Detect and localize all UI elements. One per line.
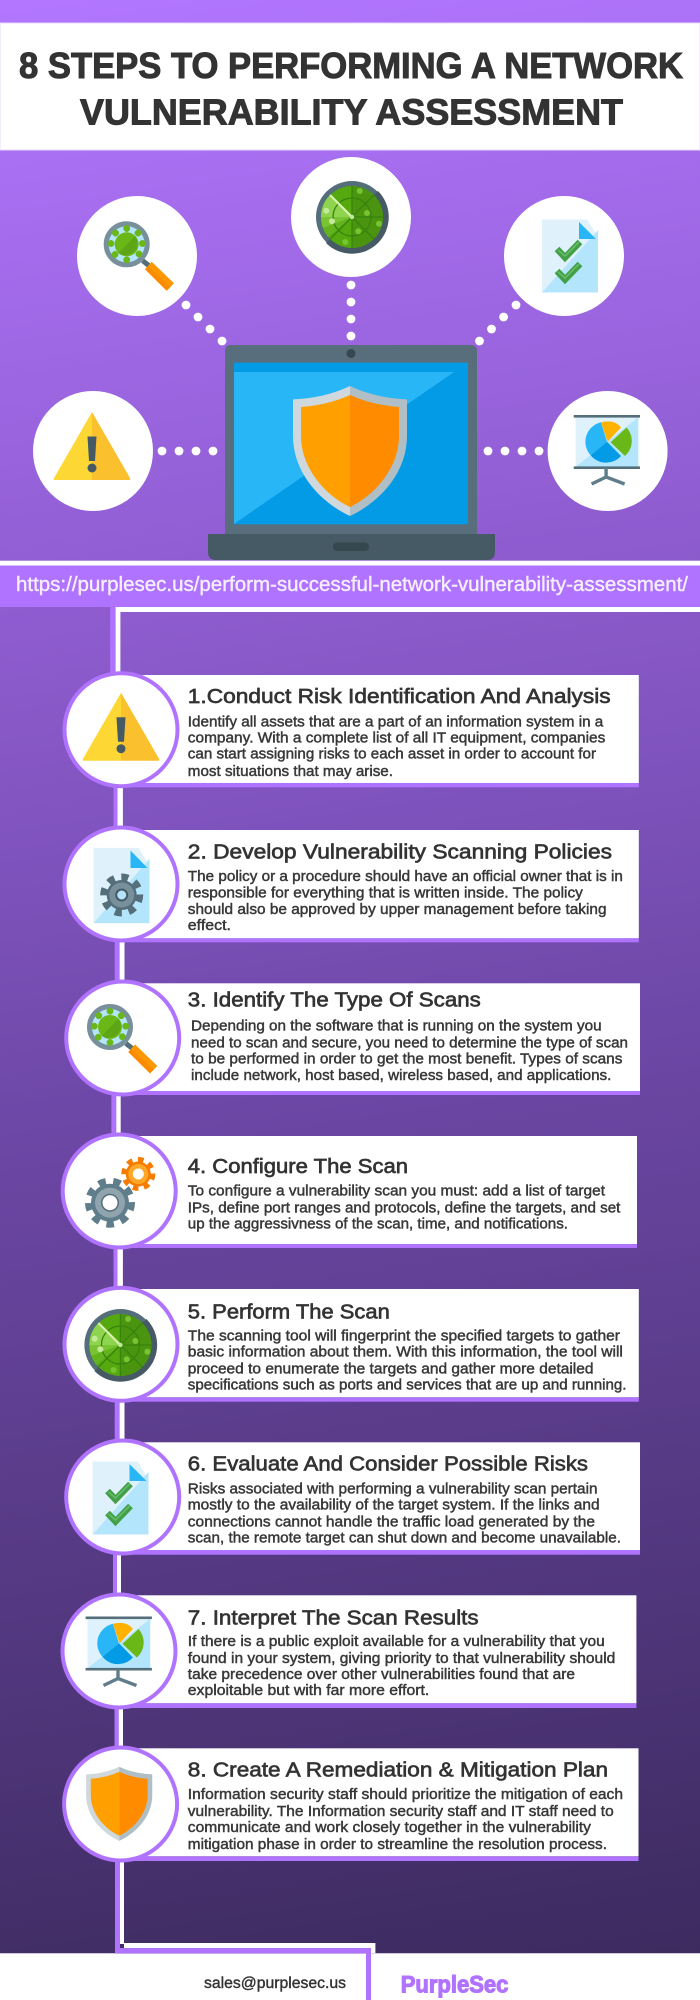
step 5 text: proceed to enumerate the targets and gather more detailed: [188, 1361, 594, 1377]
icon: warning triangle: [33, 391, 153, 511]
icon: step 1 warning: [64, 673, 178, 786]
panel: step 1 card: [121, 675, 639, 787]
step 6 text: [188, 1482, 621, 1547]
step 6 text: scan, the remote target can shut down and become unavailable.: [188, 1531, 621, 1547]
step 5: [64, 1288, 639, 1402]
icon: step 7 presentation chart: [62, 1594, 176, 1708]
step 8 text: vulnerability. The Information security staff and IT staff need to: [188, 1804, 614, 1820]
step 7 text: [188, 1634, 615, 1699]
panel: step 5 card: [121, 1289, 639, 1402]
icon: radar: [291, 157, 411, 277]
hero illustration: [33, 157, 668, 560]
icon: magnifier with virus: [77, 196, 197, 316]
icon: step 2 policy document gear: [64, 828, 178, 940]
step 4: [63, 1134, 637, 1248]
icon: checklist document: [504, 196, 624, 316]
timeline connector: [110, 607, 700, 1950]
step 8 heading: 8. Create A Remediation & Mitigation Plan: [188, 1759, 608, 1782]
step 1 text: Identify all assets that are a part of an information system in a: [188, 715, 604, 731]
panel: step 3 card: [122, 983, 640, 1095]
step 3 text: Depending on the software that is running on the system you: [191, 1019, 602, 1035]
step 8 text: Information security staff should prioritize the mitigation of each: [188, 1787, 623, 1803]
url banner: https://purplesec.us/perform-successful-network-vulnerability-assessment/: [16, 574, 688, 596]
step 3 text: to be performed in order to get the most benefit. Types of scans: [191, 1051, 622, 1067]
step 7 text: take precedence over other vulnerabilities found that are: [188, 1667, 575, 1683]
step 4 text: IPs, define port ranges and protocols, define the targets, and set: [188, 1200, 620, 1216]
dotted connectors: [158, 281, 543, 455]
step 8: [64, 1748, 639, 1861]
step 1 heading: 1.Conduct Risk Identification And Analysis: [188, 685, 611, 708]
step 5 heading: 5. Perform The Scan: [188, 1300, 390, 1323]
step 2 text: [188, 869, 623, 934]
step 2 heading: 2. Develop Vulnerability Scanning Policies: [188, 840, 612, 863]
step 8 text: [188, 1787, 623, 1853]
step 1 text: most situations that may arise.: [188, 764, 393, 780]
step 3: [66, 982, 640, 1095]
step 4 text: [188, 1184, 620, 1233]
step 5 text: basic information about them. With this information, the tool will: [188, 1345, 623, 1361]
step 3 text: need to scan and secure, you need to determine the type of scan: [191, 1035, 628, 1051]
email: sales@purplesec.us: [204, 1975, 346, 1992]
panel: step 4 card: [119, 1136, 637, 1248]
panel: step 7 card: [119, 1595, 636, 1708]
title line 2: VULNERABILITY ASSESSMENT: [80, 92, 623, 132]
step 6: [66, 1440, 640, 1555]
title panel: [0, 23, 700, 150]
icon: step 8 shield: [64, 1748, 177, 1860]
icon: presentation chart: [548, 391, 668, 511]
step 6 text: mostly to the availability of the target system. If the links and: [188, 1498, 600, 1514]
step 4 text: up the aggressivness of the scan, time, and notifications.: [188, 1217, 568, 1233]
step 4 heading: 4. Configure The Scan: [188, 1155, 408, 1178]
step 5 text: specifications such as ports and services that are up and running.: [188, 1377, 627, 1393]
step 4 text: To configure a vulnerability scan you must: add a list of target: [188, 1184, 605, 1200]
laptop with shield: [208, 345, 495, 560]
step 2 text: The policy or a procedure should have an official owner that is in: [188, 869, 623, 885]
step 7 text: found in your system, giving priority to that vulnerability should: [188, 1651, 615, 1667]
icon: step 3 magnifier: [66, 982, 179, 1094]
step 1 text: [188, 715, 605, 780]
step 2 text: responsible for everything that is written inside. The policy: [188, 885, 584, 901]
step 5 text: The scanning tool will fingerprint the specified targets to gather: [188, 1329, 620, 1345]
icon: step 5 radar: [64, 1288, 178, 1401]
logo: PurpleSec: PurpleSec: [401, 1972, 508, 1999]
step 5 text: [188, 1329, 627, 1393]
step 2 text: effect.: [188, 918, 231, 934]
step 1: [64, 673, 639, 787]
step 3 text: include network, host based, wireless based, and applications.: [191, 1068, 611, 1084]
step 3 heading: 3. Identify The Type Of Scans: [188, 989, 481, 1012]
icon: step 6 checklist document: [66, 1440, 179, 1554]
step 2: [64, 828, 639, 942]
step 7 text: exploitable but with far more effort.: [188, 1683, 429, 1699]
url banner: [0, 561, 700, 607]
step 6 heading: 6. Evaluate And Consider Possible Risks: [188, 1453, 588, 1476]
step 3 text: [191, 1019, 628, 1084]
panel: step 2 card: [121, 830, 639, 942]
step 6 text: Risks associated with performing a vulnerability scan pertain: [188, 1482, 598, 1498]
step 7 text: If there is a public exploit available for a vulnerability that you: [188, 1634, 605, 1650]
panel: step 8 card: [120, 1748, 638, 1861]
title line 1: 8 STEPS TO PERFORMING A NETWORK: [19, 45, 683, 86]
panel: step 6 card: [122, 1442, 640, 1555]
step 2 text: should also be approved by upper management before taking: [188, 902, 607, 918]
step 8 text: communicate and work closely together in the vulnerability: [188, 1820, 592, 1836]
footer connector: [115, 1943, 375, 2000]
step 8 text: mitigation phase in order to streamline the resolution process.: [188, 1837, 607, 1853]
step 1 text: company. With a complete list of all IT equipment, companies: [188, 731, 605, 747]
step 7: [62, 1594, 636, 1708]
footer: [0, 1943, 700, 2000]
step 7 heading: 7. Interpret The Scan Results: [188, 1606, 479, 1629]
step 1 text: can start assigning risks to each asset in order to account for: [188, 747, 596, 763]
icon: step 4 gears: [63, 1134, 176, 1248]
step 6 text: connections cannot handle the traffic load generated by the: [188, 1515, 595, 1531]
